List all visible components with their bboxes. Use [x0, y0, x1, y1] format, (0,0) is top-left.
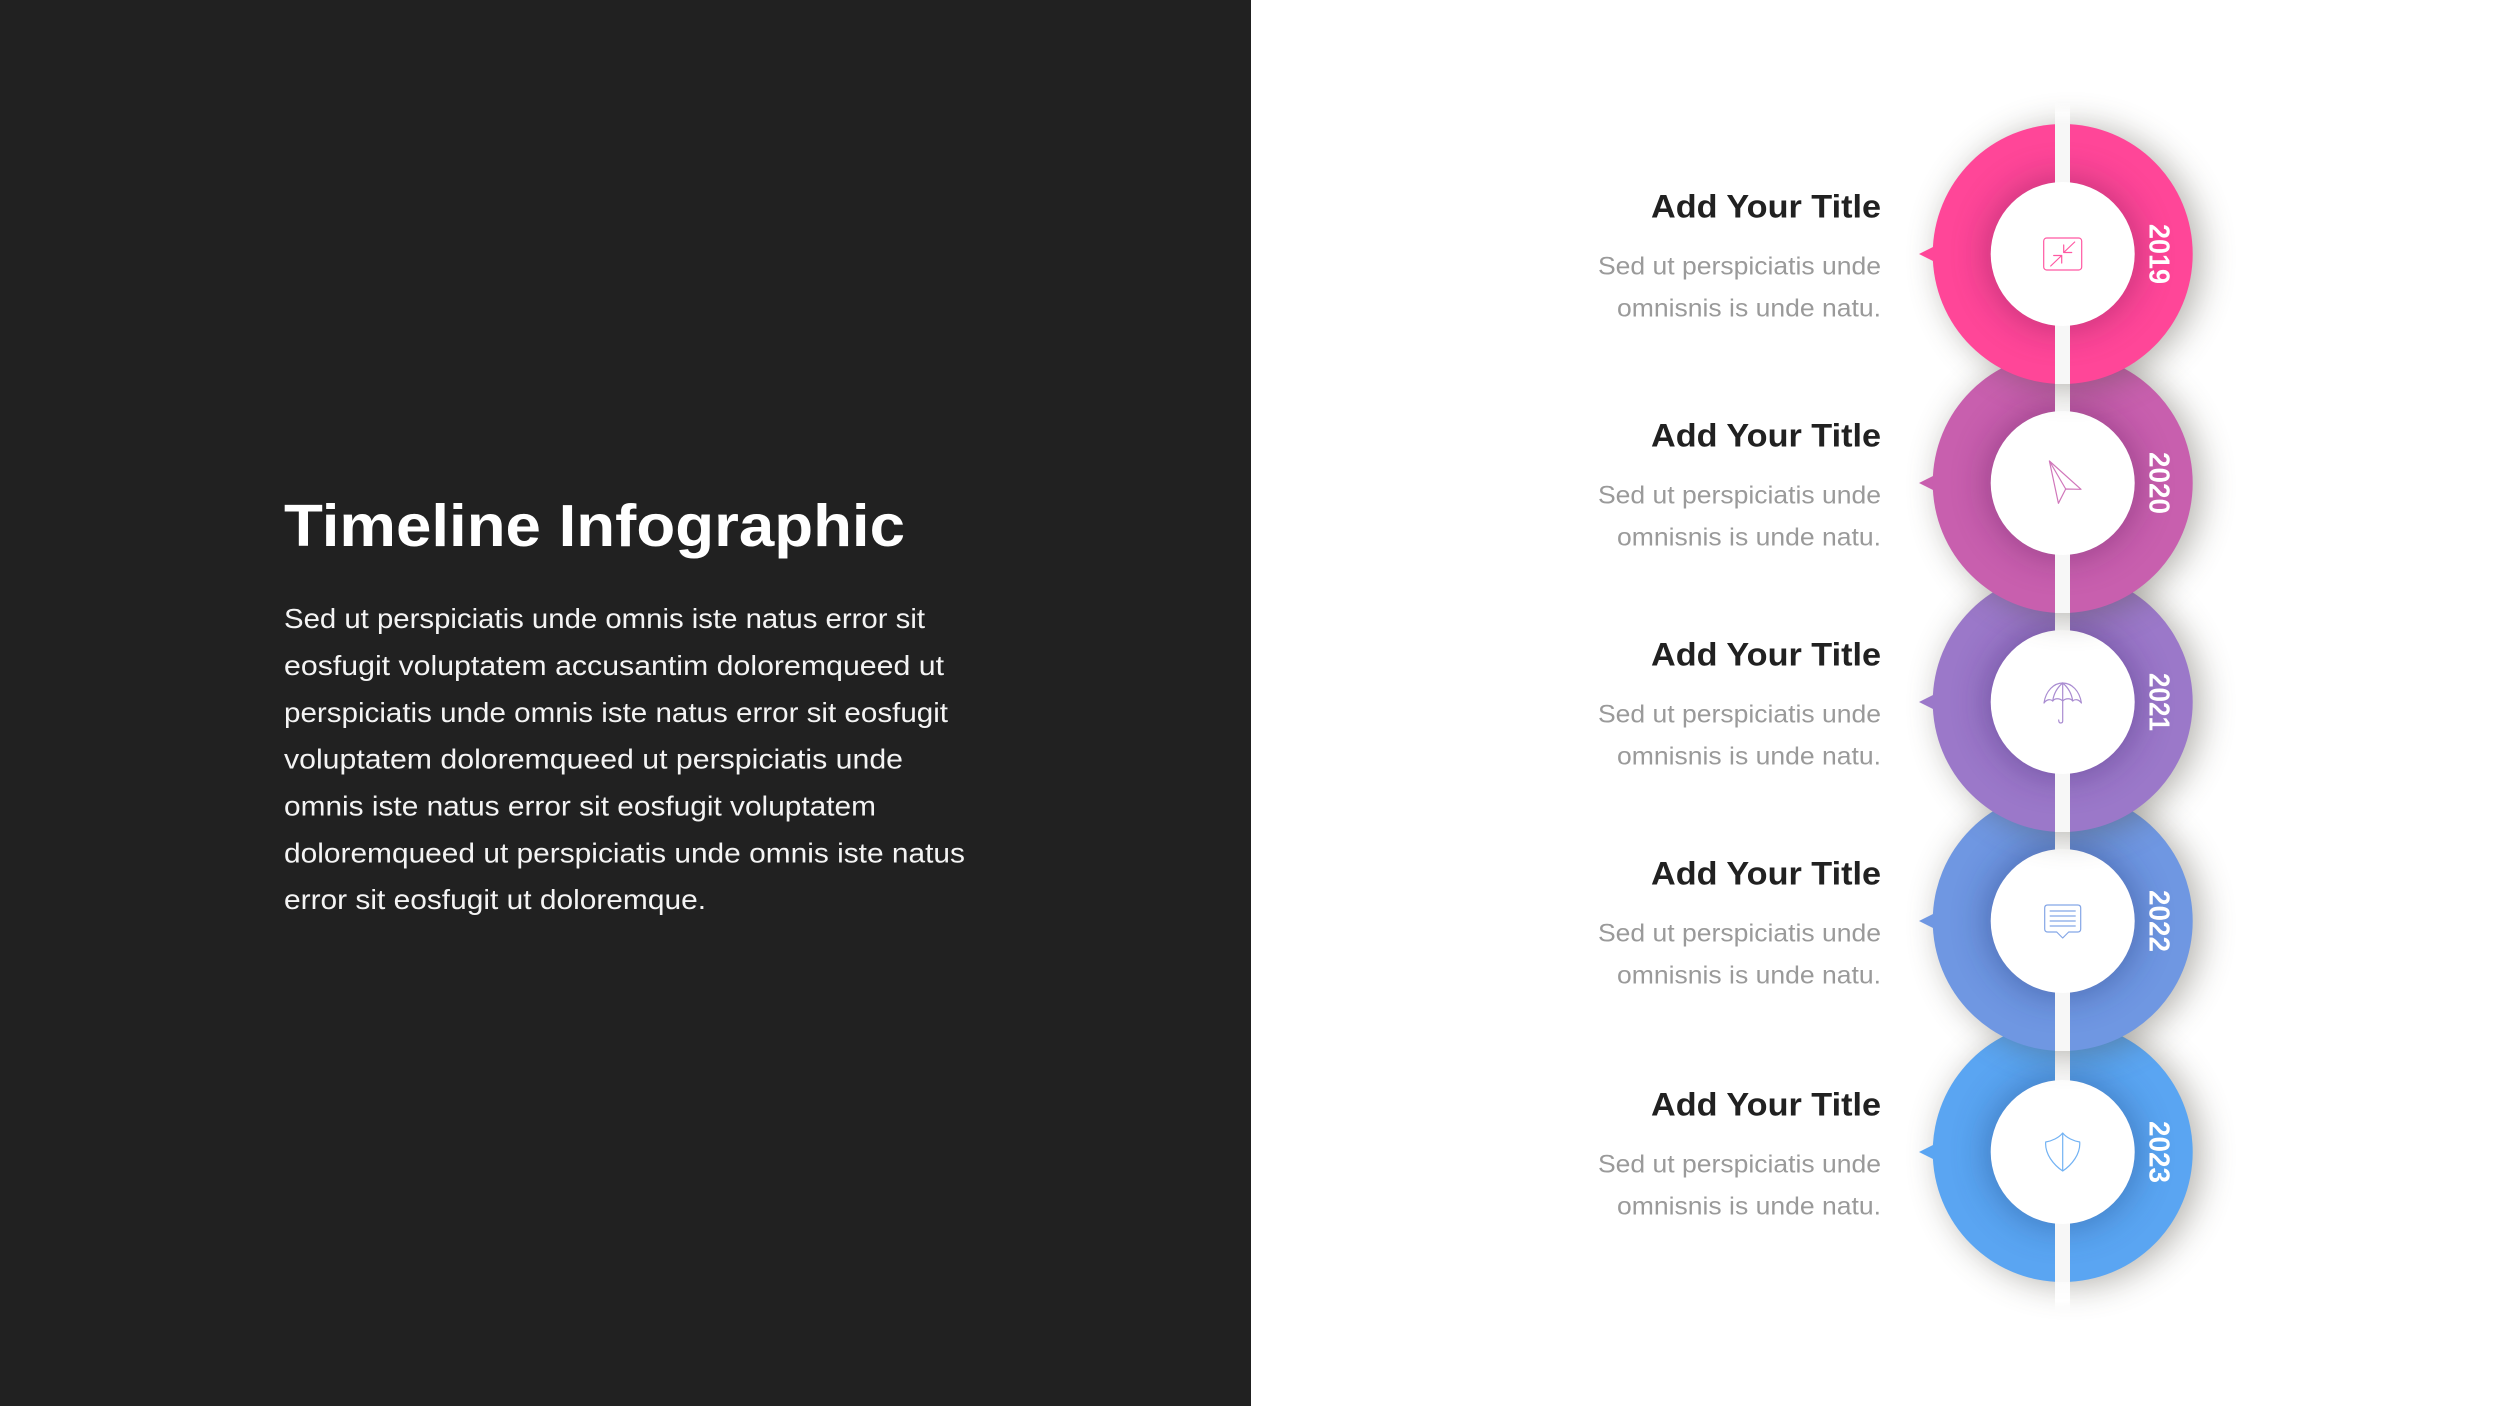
description 2021: Sed ut perspiciatis unde — [1598, 700, 1881, 728]
title 2021: Add Your Title — [1651, 636, 1881, 672]
year 2021: 2021 — [2142, 673, 2174, 731]
icon: speech bubble — [2045, 905, 2081, 938]
text block: description: error sit eosfugit ut doloremque. — [284, 884, 706, 915]
description 2022 — [1598, 920, 1881, 990]
description 2020: omnisnis is unde natu. — [1617, 524, 1881, 552]
step 2021 — [1598, 572, 2201, 835]
title 2019: Add Your Title — [1651, 188, 1881, 224]
year 2020: 2020 — [2142, 452, 2174, 514]
text block: description: Sed ut perspiciatis unde omnis iste natus error sit — [284, 603, 925, 634]
ring 2021 — [1919, 572, 2201, 835]
icon: paper plane — [2049, 461, 2081, 503]
description 2019 — [1598, 252, 1881, 322]
description 2020: Sed ut perspiciatis unde — [1598, 482, 1881, 510]
description 2021 — [1598, 700, 1881, 770]
panel: dark left background — [0, 0, 1251, 1406]
description 2020 — [1598, 482, 1881, 552]
ring 2023 — [1919, 1022, 2201, 1285]
year 2019: 2019 — [2142, 224, 2174, 284]
step 2022 — [1598, 791, 2201, 1054]
text block: description: voluptatem doloremqueed ut perspiciatis unde — [284, 744, 903, 774]
text block: description: omnis iste natus error sit eosfugit voluptatem — [284, 790, 876, 822]
icon: compress arrows — [2044, 238, 2082, 270]
description 2022: omnisnis is unde natu. — [1617, 962, 1881, 990]
year 2023: 2023 — [2142, 1121, 2174, 1183]
timeline bottom stripe extension — [2055, 1282, 2070, 1314]
year 2022: 2022 — [2142, 890, 2174, 952]
text block: description: eosfugit voluptatem accusantim doloremqueed ut — [284, 650, 944, 681]
text block: description: doloremqueed ut perspiciatis unde omnis iste natus — [284, 838, 965, 868]
icon: shield — [2046, 1133, 2080, 1171]
title 2023: Add Your Title — [1651, 1086, 1881, 1122]
ring 2022 — [1919, 791, 2201, 1054]
description 2023: Sed ut perspiciatis unde — [1598, 1150, 1881, 1178]
timeline top stripe extension — [2055, 102, 2070, 124]
description 2022: Sed ut perspiciatis unde — [1598, 920, 1881, 948]
title 2020: Add Your Title — [1651, 418, 1881, 454]
step 2023 — [1598, 1022, 2201, 1285]
description 2023: omnisnis is unde natu. — [1617, 1192, 1881, 1220]
description 2023 — [1598, 1150, 1881, 1220]
title 2022: Add Your Title — [1651, 856, 1881, 892]
text block: description — [284, 603, 965, 915]
description 2019: Sed ut perspiciatis unde — [1598, 252, 1881, 280]
heading: Timeline Infographic: Timeline Infographic — [284, 493, 905, 559]
step 2020 — [1598, 353, 2201, 616]
ring 2019 — [1919, 124, 2201, 387]
text block: description: perspiciatis unde omnis iste natus error sit eosfugit — [284, 697, 948, 728]
step 2019 — [1598, 124, 2201, 387]
ring 2020 — [1919, 353, 2201, 616]
description 2019: omnisnis is unde natu. — [1617, 294, 1881, 322]
icon: umbrella — [2044, 683, 2081, 723]
description 2021: omnisnis is unde natu. — [1617, 742, 1881, 770]
